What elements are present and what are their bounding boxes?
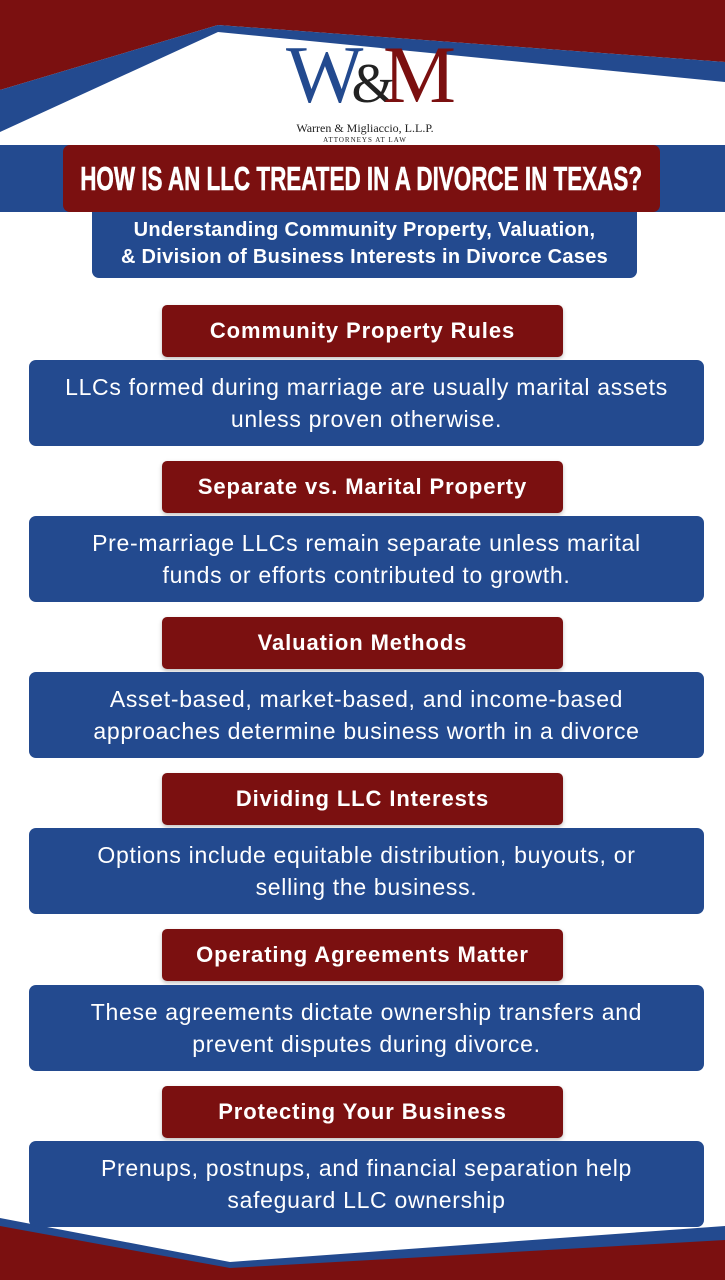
text: operating	[29, 985, 704, 1071]
header: Operating Agreements: Operating Agreements Matter	[196, 942, 529, 967]
header: Valuation Methods	[162, 617, 563, 669]
text: dividing: selling the business.	[256, 874, 477, 900]
text: operating: prevent disputes during divorce.	[192, 1031, 541, 1057]
text: separate	[29, 516, 704, 602]
logo: ATTORNEYS AT LAW	[323, 136, 407, 144]
text: operating: These agreements dictate ownership transfers and	[91, 999, 642, 1025]
text: dividing	[29, 828, 704, 914]
header: Dividing LLC Interests: Dividing LLC Interests	[236, 786, 489, 811]
text: protecting	[29, 1141, 704, 1227]
text: separate: funds or efforts contributed to growth.	[163, 562, 570, 588]
header: Community Property Rules: Community Property Rules	[210, 318, 515, 343]
header: Separate vs Marital	[162, 461, 563, 513]
title	[63, 145, 660, 212]
text: dividing: Options include equitable distribution, buyouts, or	[97, 842, 636, 868]
header: Separate vs Marital: Separate vs. Marital Property	[198, 474, 527, 499]
text: community	[29, 360, 704, 446]
text: separate: Pre-marriage LLCs remain separate unless marital	[92, 530, 641, 556]
logo: W&M	[286, 29, 444, 120]
text: protecting: Prenups, postnups, and financial separation help	[101, 1155, 632, 1181]
text: valuation: Asset-based, market-based, and income-based	[110, 686, 623, 712]
header: Valuation Methods: Valuation Methods	[258, 630, 467, 655]
text: valuation: approaches determine business worth in a divorce	[93, 718, 640, 744]
header: Community Property Rules	[162, 305, 563, 357]
header: Protecting Your Business	[162, 1086, 563, 1138]
header: Operating Agreements	[162, 929, 563, 981]
text: community: unless proven otherwise.	[231, 406, 502, 432]
subtitle: & Division of Business Interests in Divorce Cases	[121, 246, 608, 268]
subtitle	[92, 212, 637, 278]
text: valuation	[29, 672, 704, 758]
header: Protecting Your Business: Protecting Your Business	[218, 1099, 507, 1124]
text: community: LLCs formed during marriage are usually marital assets	[65, 374, 668, 400]
title: HOW IS AN LLC TREATED IN A DIVORCE IN TEXAS?	[81, 160, 642, 196]
subtitle: Understanding Community Property, Valuation,	[134, 219, 595, 241]
header: Dividing LLC Interests	[162, 773, 563, 825]
logo: Warren & Migliaccio, L.L.P.	[296, 121, 434, 135]
text: protecting: safeguard LLC ownership	[227, 1187, 506, 1213]
